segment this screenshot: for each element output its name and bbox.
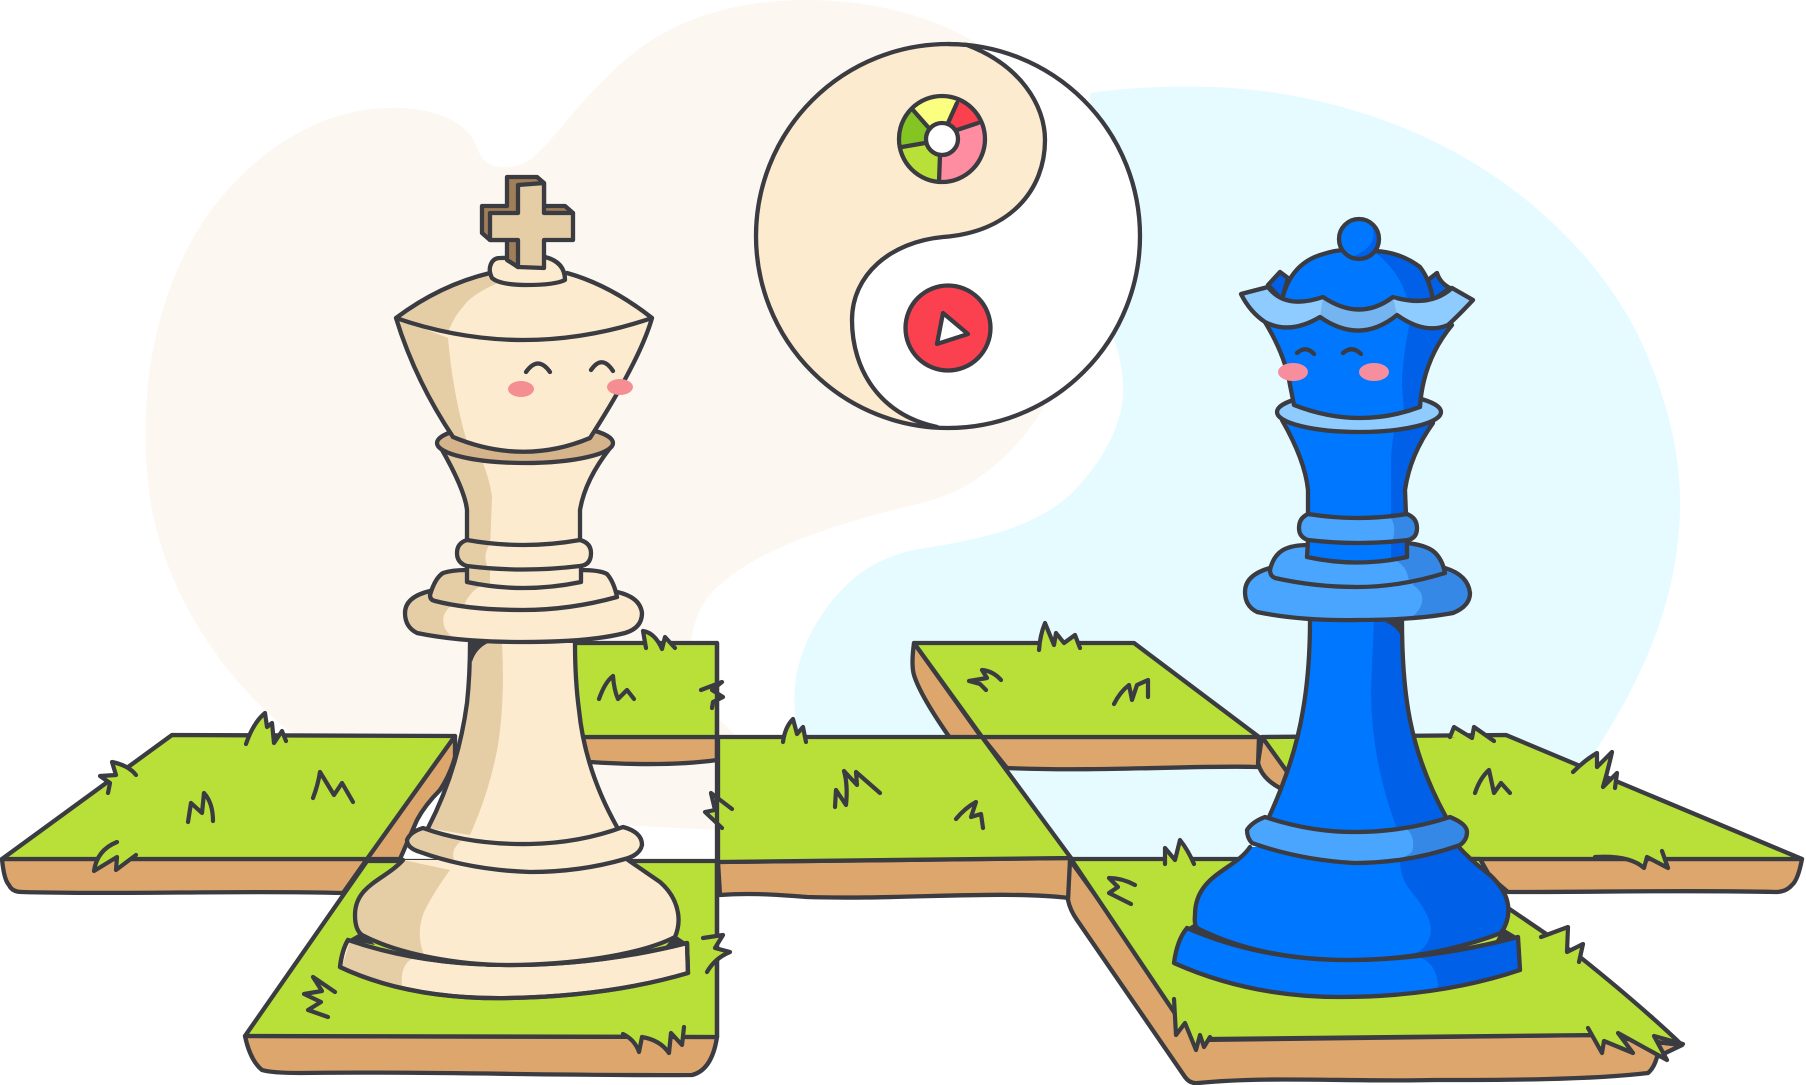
queen: lower body (1195, 845, 1508, 960)
king: cross (482, 177, 573, 268)
yin-yang circle (756, 44, 1140, 428)
tile: right (1258, 727, 1802, 892)
king: upper base (405, 570, 642, 642)
queen: cheeks (1278, 363, 1389, 381)
grass tufts on king tile (304, 935, 730, 1053)
grass tufts on queen tile (1109, 840, 1683, 1060)
king: crown and face (396, 273, 652, 452)
king: upper neck and rings (441, 448, 610, 588)
tile: centre (705, 719, 1071, 898)
queen: ball on top (1339, 219, 1379, 259)
queen: eyes (1297, 349, 1361, 354)
tile: back behind king (490, 631, 723, 764)
queen: upper base (1245, 543, 1470, 620)
king: cheeks (508, 379, 633, 397)
grass tufts on right tile (1450, 727, 1668, 868)
queen: tall neck (1269, 620, 1446, 850)
king: foot plate (340, 932, 688, 998)
background blob: beige (146, 0, 1050, 832)
king: lower body (355, 860, 679, 965)
king chess piece (340, 177, 688, 998)
grass tufts on left tile (94, 713, 353, 871)
queen: crown horns (1268, 272, 1450, 300)
queen: crown dome (1282, 250, 1433, 310)
king: eyes (526, 362, 613, 372)
queen: upper neck and rings (1282, 420, 1433, 562)
king: knob (490, 257, 565, 285)
icon: red play button (906, 286, 990, 370)
tile: under queen (1068, 840, 1683, 1083)
tile: under king (245, 643, 730, 1075)
king: lower ring (407, 827, 642, 872)
king: collar (437, 423, 613, 463)
grass tufts on top centre tile (969, 623, 1148, 704)
tile: left (2, 713, 455, 893)
background blob: light blue (794, 87, 1680, 870)
tile: top centre right (912, 623, 1259, 769)
king: tall neck (428, 640, 617, 850)
queen chess piece (1174, 219, 1520, 997)
queen: head (1265, 300, 1452, 418)
queen: lower ring (1247, 817, 1467, 863)
queen: frilled crown band (1241, 287, 1473, 331)
queen: foot plate (1174, 922, 1520, 997)
queen: collar (1277, 392, 1441, 432)
grass tufts on centre tile (705, 719, 983, 828)
icon: donut chart (899, 96, 985, 182)
grass tufts on back tile (599, 631, 723, 708)
